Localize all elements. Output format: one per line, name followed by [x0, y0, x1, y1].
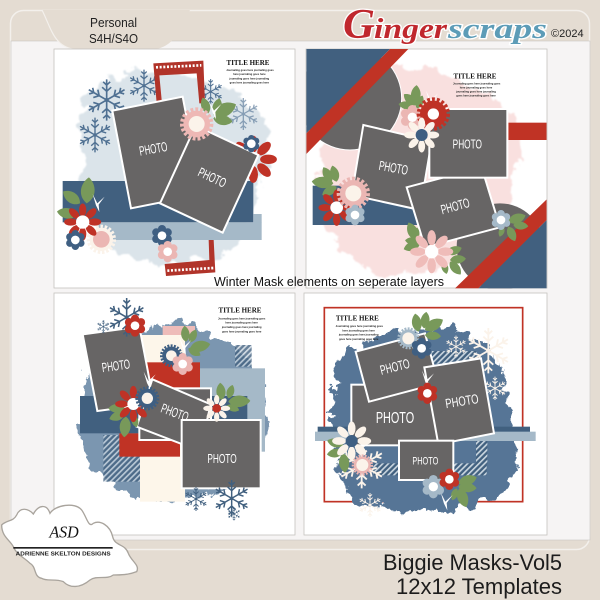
flower cluster center	[161, 325, 211, 375]
gray circle bottom right	[457, 203, 543, 290]
pink wash	[320, 63, 521, 274]
title text: TITLE HERE	[219, 307, 262, 315]
title text: here journaling goes here	[342, 328, 375, 332]
flower cluster left	[56, 177, 114, 252]
photo frame bottom: PHOTO	[439, 195, 471, 217]
photo frame 2: PHOTO	[196, 165, 229, 191]
designer logo: Adrienne Skelton Designs	[2, 505, 137, 586]
title text: Journaling goes here journaling goes	[218, 316, 266, 320]
title text: TITLE HERE	[227, 59, 270, 67]
card 1: template top left	[54, 49, 295, 288]
photo frame 2	[160, 126, 258, 233]
photo frame top	[356, 333, 438, 402]
title text: Journaling goes here journaling goes	[226, 68, 274, 72]
title text	[218, 307, 266, 334]
card 3: template bottom left	[54, 293, 295, 535]
label tab: Personal S4H/S4O: Personal	[90, 15, 137, 30]
title text: journaling goes here journaling	[455, 90, 496, 94]
flower cluster right	[203, 382, 251, 422]
label tab: Personal S4H/S4O	[42, 10, 190, 50]
photo frame left: PHOTO	[378, 158, 409, 178]
logo: Gingerscraps	[343, 2, 584, 48]
gray circle top left	[306, 58, 402, 150]
photo frame 3: PHOTO	[207, 451, 237, 466]
title text: journaling goes here journaling	[221, 325, 262, 329]
navy and light bars	[315, 427, 536, 441]
white snowflakes	[339, 328, 510, 517]
product title: Biggie Masks-Vol5	[383, 550, 562, 575]
title text	[336, 314, 384, 341]
title text: here journaling goes here	[460, 86, 493, 90]
title text: goes here journaling goes here	[230, 80, 270, 84]
card 4: template bottom right	[304, 293, 547, 535]
photo frame 2: PHOTO	[159, 401, 191, 424]
light blue band	[97, 222, 262, 240]
photo frame 1: PHOTO	[138, 139, 168, 159]
title text: here journaling goes here	[233, 72, 266, 76]
watercolor wash	[82, 70, 270, 263]
photo frame large	[351, 385, 441, 445]
title text: journaling goes here journaling	[228, 76, 270, 80]
snowflakes	[78, 70, 259, 152]
red square outline	[324, 308, 523, 502]
label tab: Personal S4H/S4O: S4H/S4O	[89, 31, 138, 46]
red bar right	[508, 123, 547, 140]
paper stack	[80, 326, 265, 502]
designer logo: Adrienne Skelton Designs: ASD	[48, 523, 79, 542]
title text: goes here journaling goes here	[456, 94, 496, 98]
logo: Gingerscraps: G	[343, 2, 375, 48]
photo frame right	[424, 358, 494, 444]
title text	[453, 73, 501, 98]
flower center	[418, 371, 437, 404]
logo: Gingerscraps: scraps	[447, 13, 547, 45]
card 2: template top right	[298, 47, 547, 290]
striped accents	[103, 345, 252, 482]
flower cluster left	[108, 372, 158, 438]
flower cluster left	[326, 421, 372, 474]
flower cluster left	[311, 164, 368, 226]
flower cluster bottom	[152, 225, 177, 262]
title text: goes here journaling goes here	[222, 330, 262, 334]
title text: TITLE HERE	[336, 314, 379, 322]
photo frame small: PHOTO	[412, 456, 438, 468]
product title: 12x12 Templates	[396, 574, 562, 599]
flower cluster right	[492, 210, 529, 243]
photo frame top: PHOTO	[379, 356, 411, 378]
title text: TITLE HERE	[454, 73, 497, 81]
flower top	[125, 315, 145, 337]
navy wash	[80, 322, 268, 501]
navy corner and red band	[306, 49, 408, 154]
photo frame large: PHOTO	[376, 410, 414, 427]
title text: goes here journaling goes here	[339, 337, 379, 341]
flower cluster top	[399, 311, 446, 359]
title text: Journaling goes here journaling goes	[336, 324, 384, 328]
photo frame 1	[83, 327, 154, 411]
logo: Gingerscraps: inger	[374, 13, 448, 45]
film strip	[153, 61, 215, 276]
title text: here journaling goes here	[225, 321, 258, 325]
photo frame 3	[182, 420, 261, 488]
photo frame 1	[112, 97, 201, 208]
flower cluster bottom	[404, 222, 466, 274]
product title	[383, 550, 562, 599]
flower cluster bottom	[423, 469, 478, 510]
photo frame right	[429, 109, 507, 178]
photo frame 1: PHOTO	[101, 356, 131, 375]
logo: Gingerscraps: ©2024	[551, 28, 584, 40]
navy bar left	[313, 186, 420, 225]
title text	[226, 59, 274, 84]
snowflakes	[97, 298, 250, 521]
photo frame bottom	[406, 178, 498, 248]
navy wash	[333, 328, 517, 512]
photo frame right: PHOTO	[453, 136, 482, 151]
navy corner bottom right	[455, 199, 547, 288]
striped accents	[373, 351, 487, 475]
designer logo: Adrienne Skelton Designs: ADRIENNE SKELTON DESIGNS	[16, 551, 111, 557]
title text: journaling goes here journaling	[338, 333, 379, 337]
red petal flower behind photos	[230, 136, 277, 183]
flower cluster top right	[182, 96, 259, 152]
photo frame small	[399, 441, 453, 480]
photo frame right: PHOTO	[444, 391, 480, 411]
photo frame left	[352, 125, 432, 210]
navy band	[63, 181, 253, 222]
caption: Winter Mask elements: Winter Mask elements on seperate layers	[214, 274, 444, 289]
title text: Journaling goes here journaling goes	[453, 82, 501, 86]
back photo frame	[139, 388, 211, 440]
flower cluster top	[398, 85, 448, 153]
photo frame 2	[137, 379, 211, 451]
